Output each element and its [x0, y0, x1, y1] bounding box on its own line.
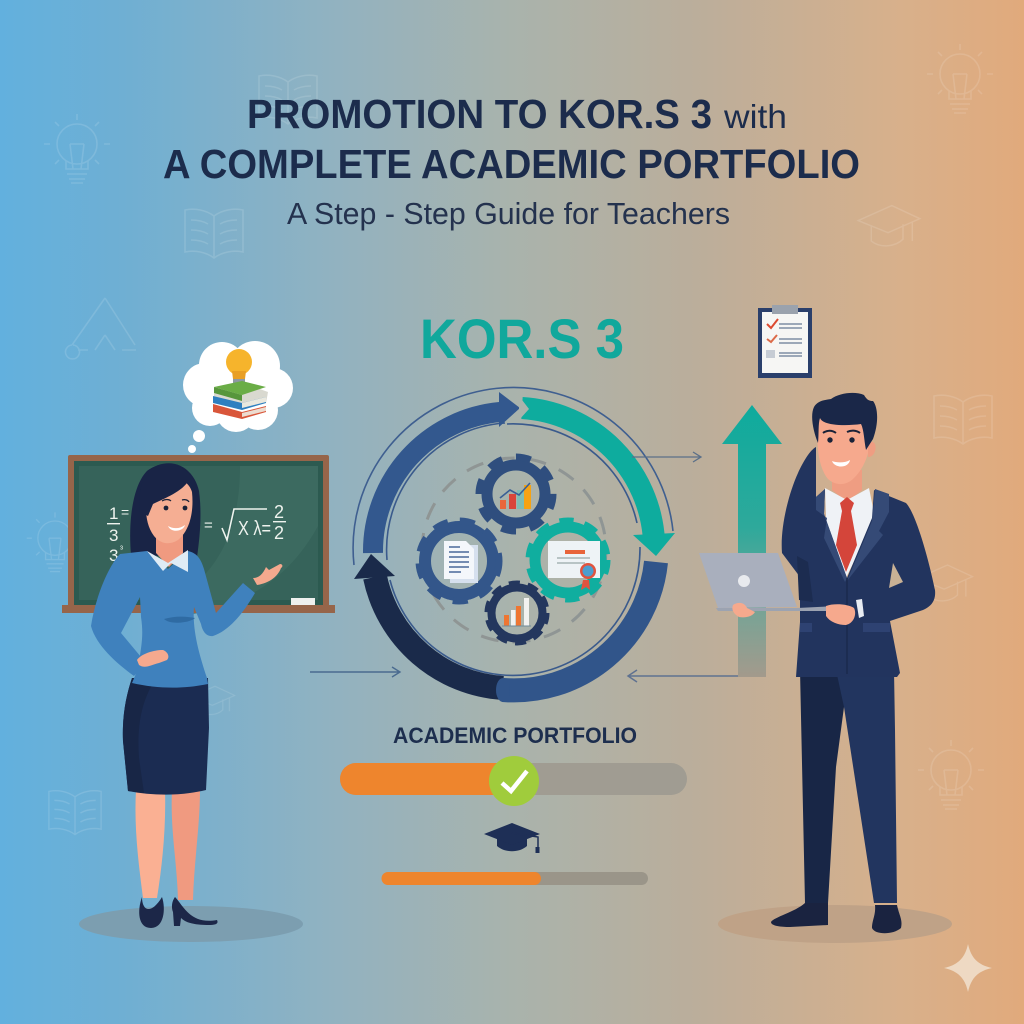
jacket pockets: [800, 623, 890, 632]
thin inner ring: [387, 423, 640, 675]
icon: graduation cap: [484, 823, 540, 853]
subtitle: A Step - Step Guide for Teachers: [287, 196, 730, 231]
icon: stack of books: [213, 381, 268, 419]
thin outer ring: [353, 387, 673, 565]
circular process diagram: [353, 387, 675, 702]
title: A COMPLETE ACADEMIC PORTFOLIO: [163, 141, 860, 187]
businessman figure: [699, 393, 952, 943]
sparkle: [944, 944, 992, 992]
tie: [836, 497, 857, 572]
decorative background icons: [27, 44, 993, 835]
chalk equations: [107, 502, 286, 565]
gear: bar chart: [487, 583, 547, 643]
teal arc segment with arrow: [519, 396, 675, 556]
chalk equations: 1: [109, 504, 118, 523]
shoes: [139, 897, 218, 928]
chalkboard: [62, 455, 335, 616]
label: academic portfolio: ACADEMIC PORTFOLIO: [393, 723, 637, 748]
face: [817, 415, 870, 484]
blue arc segment with arrow: [373, 392, 520, 553]
chalk equations: ³: [120, 544, 123, 554]
gear: growth chart: [479, 457, 553, 531]
skirt: [123, 678, 209, 795]
ledge and chalk eraser: [62, 605, 335, 613]
shirt: [825, 488, 875, 580]
chalk equations: =: [121, 504, 129, 520]
hand on hip: [137, 650, 168, 667]
front hair: [139, 464, 200, 517]
neck: [156, 535, 183, 567]
hands: [732, 603, 855, 625]
chalk equations: 2: [274, 502, 284, 522]
navy arc segment with arrow: [354, 554, 503, 688]
jacket: [782, 447, 935, 677]
gear: certificate: [529, 521, 607, 599]
shirt cuff: [856, 599, 864, 618]
legs: [135, 790, 200, 900]
facial features: [823, 431, 860, 467]
shoes: [771, 903, 902, 933]
chalk equations: X λ=: [238, 518, 271, 540]
floor shadow: [79, 906, 303, 942]
heading: KOR.S 3: KOR.S 3: [420, 307, 624, 370]
sweater: [91, 551, 255, 688]
dashed inner ring: [422, 458, 606, 642]
chalk equations: =: [204, 517, 213, 534]
trousers: [800, 670, 897, 903]
chalk equations: 2: [274, 523, 284, 543]
title: with: [723, 98, 787, 135]
back hair: [130, 463, 200, 557]
thought bubble with bulb and books: [183, 341, 293, 453]
chalk equations: 3: [109, 526, 118, 545]
icon: light bulb: [226, 349, 252, 388]
teacher figure: [79, 463, 303, 942]
connector arrow lower right: [628, 670, 738, 682]
connector arrow left: [310, 667, 400, 677]
large progress bar: [340, 756, 687, 806]
upward growth arrow: [722, 405, 782, 677]
hair: [812, 393, 877, 450]
title: [163, 91, 860, 187]
clipboard checklist: [758, 305, 812, 378]
title: PROMOTION TO KOR.S 3: [247, 91, 712, 137]
chalk equations: 3: [109, 546, 118, 565]
check badge: [489, 756, 539, 806]
hand gesture: [253, 564, 282, 585]
collar: [147, 550, 188, 572]
neck: [832, 470, 862, 502]
gear: documents: [419, 521, 499, 601]
face: [145, 478, 192, 543]
facial features: [162, 500, 189, 531]
blue arc segment: [496, 562, 656, 702]
laptop: [699, 553, 837, 611]
floor shadow: [718, 905, 952, 943]
connector arrow upper right: [632, 452, 701, 462]
small progress bar: [382, 872, 648, 885]
